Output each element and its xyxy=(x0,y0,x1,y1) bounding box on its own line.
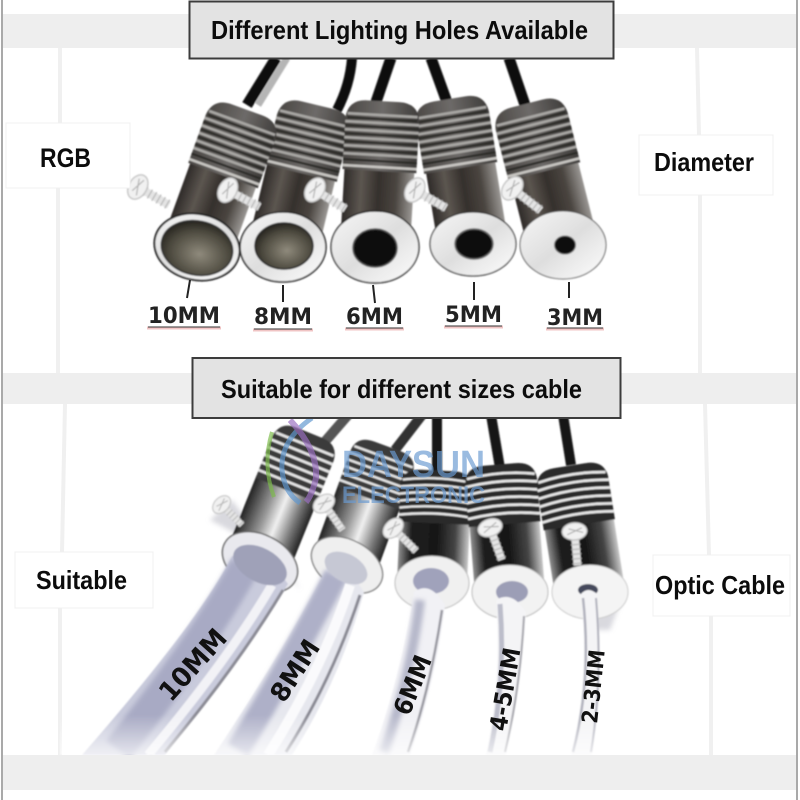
heading: Different Lighting Holes Available: Different Lighting Holes Available xyxy=(211,15,588,45)
label: 5MM: 5MM xyxy=(445,303,502,328)
tube label: 8MM: 8MM xyxy=(265,634,327,708)
cables: top connectors xyxy=(247,58,525,110)
heading: Different Lighting Holes Available xyxy=(190,2,614,58)
label box: Optic Cable xyxy=(653,555,790,616)
watermark logo xyxy=(267,418,485,509)
tube label: 10MM: 10MM xyxy=(153,623,234,708)
cable tube: 2-3MM xyxy=(552,565,628,755)
panel: cable connectors xyxy=(60,415,660,755)
cable tube: 4-5MM xyxy=(472,565,548,755)
face: 8MM hole xyxy=(240,212,326,282)
label: 10MM: 10MM xyxy=(148,304,220,329)
logo wordmark: DAYSUN xyxy=(342,444,485,486)
cables: lower connectors xyxy=(322,415,571,475)
label box: Diameter xyxy=(639,135,773,195)
heading: Suitable for different sizes cable: Suitable for different sizes cable xyxy=(221,374,582,404)
label: 6MM: 6MM xyxy=(346,305,403,330)
label: 8MM: 8MM xyxy=(254,305,312,330)
label: 3MM: 3MM xyxy=(547,306,603,331)
logo subtitle: ELECTRONIC xyxy=(342,482,485,509)
label box: Diameter: Diameter xyxy=(654,147,754,177)
face: 6MM hole xyxy=(331,211,419,283)
label box: Suitable xyxy=(15,552,153,608)
soft shadows xyxy=(210,500,625,630)
logo swoosh xyxy=(267,418,316,503)
label box: Suitable: Suitable xyxy=(36,565,127,595)
face: 10MM hole xyxy=(148,206,246,288)
label box: RGB: RGB xyxy=(40,143,91,173)
cable tube: 10MM xyxy=(82,519,308,755)
size ticks and labels xyxy=(147,280,604,331)
bottom band xyxy=(3,755,796,790)
set screws xyxy=(209,490,590,566)
face: 3MM hole xyxy=(520,211,606,279)
tube label: 2-3MM: 2-3MM xyxy=(578,648,611,725)
heading: Suitable for different sizes cable xyxy=(192,358,620,418)
cable tube: 6MM xyxy=(372,556,469,755)
face: 5MM hole xyxy=(430,212,516,276)
tube label: 6MM: 6MM xyxy=(388,651,438,719)
tube label: 4-5MM: 4-5MM xyxy=(484,645,526,733)
cable tube: 8MM xyxy=(214,525,392,755)
label box: Optic Cable: Optic Cable xyxy=(655,570,785,600)
connector bodies: 8MM, 5MM, 10MM, 6MM, 3MM xyxy=(162,93,599,260)
label box: RGB xyxy=(6,123,130,188)
set screws xyxy=(124,171,549,221)
connector bodies xyxy=(229,420,626,598)
panel: lighting holes connectors xyxy=(124,58,606,288)
